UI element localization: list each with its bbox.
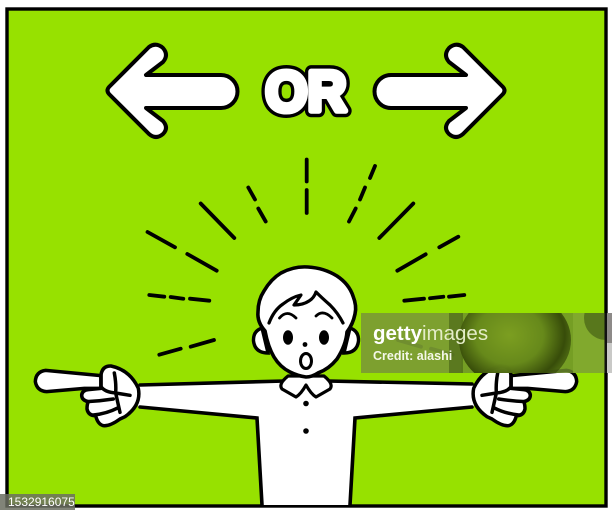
collar: [281, 376, 331, 397]
watermark: getty images credit: [361, 313, 612, 373]
right arrow: [374, 45, 504, 137]
figure: child pointing both ways: [35, 267, 577, 505]
heading: OR: OR: [265, 60, 347, 123]
emphasis rays: [148, 160, 464, 355]
image id tag: 1532916075: [8, 495, 75, 509]
eyebrows: [280, 313, 332, 318]
left ear: [253, 328, 268, 353]
heading: OR: OR: [265, 60, 347, 123]
body and arms: [138, 381, 474, 505]
right ear: [344, 328, 359, 353]
buttons: [303, 401, 309, 434]
watermark: getty images credit: Credit: alashi: [373, 349, 452, 363]
head: [258, 267, 356, 377]
eyes: [283, 330, 329, 345]
body outlines: [140, 381, 472, 505]
left arrow: [108, 45, 238, 137]
nose: [303, 342, 307, 347]
mouth: [300, 354, 312, 368]
left hand: [35, 366, 139, 426]
right hand: [473, 366, 577, 426]
watermark: getty images credit: gettyimages: [373, 322, 488, 345]
hair fringe: [269, 292, 343, 323]
